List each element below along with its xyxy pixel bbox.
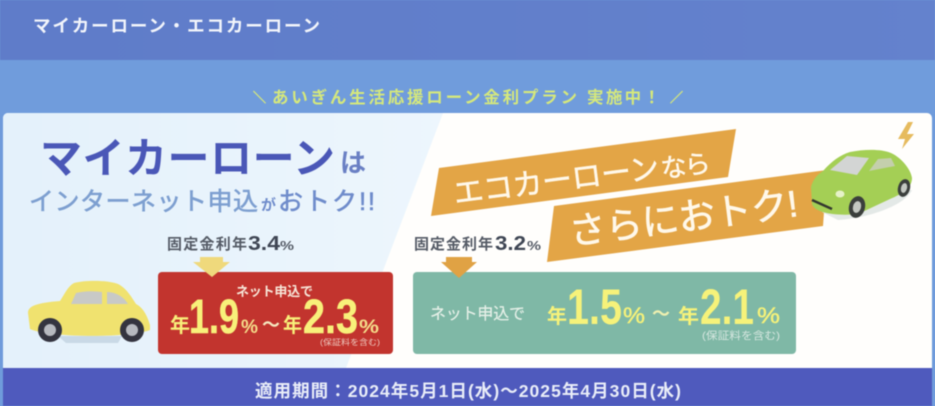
panel: green net rate box: 2.1	[700, 279, 754, 335]
panel: green net rate box: %	[757, 303, 780, 328]
fixed rate 3.2%: %	[527, 238, 542, 253]
fixed rate 3.4%: %	[280, 238, 295, 253]
campaign band: ＼	[253, 90, 266, 105]
fixed rate 3.2%: 固定金利年	[414, 235, 493, 253]
campaign band	[0, 60, 935, 114]
panel: red net rate box: ～	[262, 315, 280, 335]
panel: red net rate box: ネット申込で	[236, 284, 313, 299]
banner: even better deal	[547, 170, 827, 262]
panel: my car loan heading: マイカーローン	[40, 135, 335, 182]
panel: green net rate box: 年	[678, 305, 699, 328]
banner: eco car loan	[431, 129, 736, 216]
panel: green net rate box	[413, 272, 796, 354]
panel: green net rate box: (保証料を含む)	[702, 329, 780, 342]
icon: orange arrow	[441, 257, 477, 278]
panel: red net rate box: 1.9	[189, 291, 239, 344]
panel: my car loan heading: は	[340, 148, 366, 178]
fixed rate 3.2%: 3.2	[495, 233, 526, 255]
panel: green net rate box: 1.5	[567, 279, 622, 335]
panel: my car loan heading: インターネット申込	[29, 188, 258, 216]
panel: red net rate box: %	[241, 317, 258, 338]
panel: red net rate box	[158, 272, 393, 354]
panel: red net rate box: 年	[283, 314, 302, 337]
banner: even better deal: さらにおトク!	[567, 183, 800, 253]
banner: eco car loan: エコカーローン	[452, 152, 661, 211]
fixed rate 3.4%	[167, 233, 295, 255]
panel: my car loan heading: が	[261, 196, 276, 214]
banner: eco car loan: なら	[659, 148, 712, 184]
panel: red net rate box: 年	[170, 314, 190, 337]
panel: green net rate box: ～	[652, 304, 670, 324]
campaign band: あいぎん生活応援ローン金利プラン	[272, 87, 577, 107]
icon: yellow car	[28, 281, 150, 343]
panel: red net rate box: 2.3	[303, 291, 358, 344]
icon: green car	[811, 150, 912, 220]
panel: my car loan heading	[29, 135, 375, 216]
panel: red net rate box: %	[359, 317, 379, 338]
panel: my car loan heading: おトク!!	[278, 188, 375, 216]
icon: lightning bolt	[898, 122, 914, 149]
footer: application period: 適用期間：2024年5月1日(水)～2025年4月30日(水)	[255, 381, 681, 401]
panel: green net rate box: 年	[547, 305, 567, 328]
campaign band: ／	[670, 90, 683, 105]
panel: red net rate box: (保証料を含む)	[320, 337, 380, 347]
panel: green net rate box: ネット申込で	[430, 305, 525, 323]
campaign band: 実施中！	[587, 88, 660, 107]
panel: green net rate box: %	[623, 303, 645, 328]
fixed rate 3.4%: 固定金利年	[167, 235, 247, 253]
icon: yellow arrow	[193, 257, 230, 277]
footer: application period	[3, 368, 932, 406]
main panel	[3, 113, 932, 373]
header bar: マイカーローン・エコカーローン	[33, 16, 320, 36]
header bar	[0, 0, 935, 60]
fixed rate 3.4%: 3.4	[248, 233, 281, 255]
fixed rate 3.2%	[414, 233, 542, 255]
